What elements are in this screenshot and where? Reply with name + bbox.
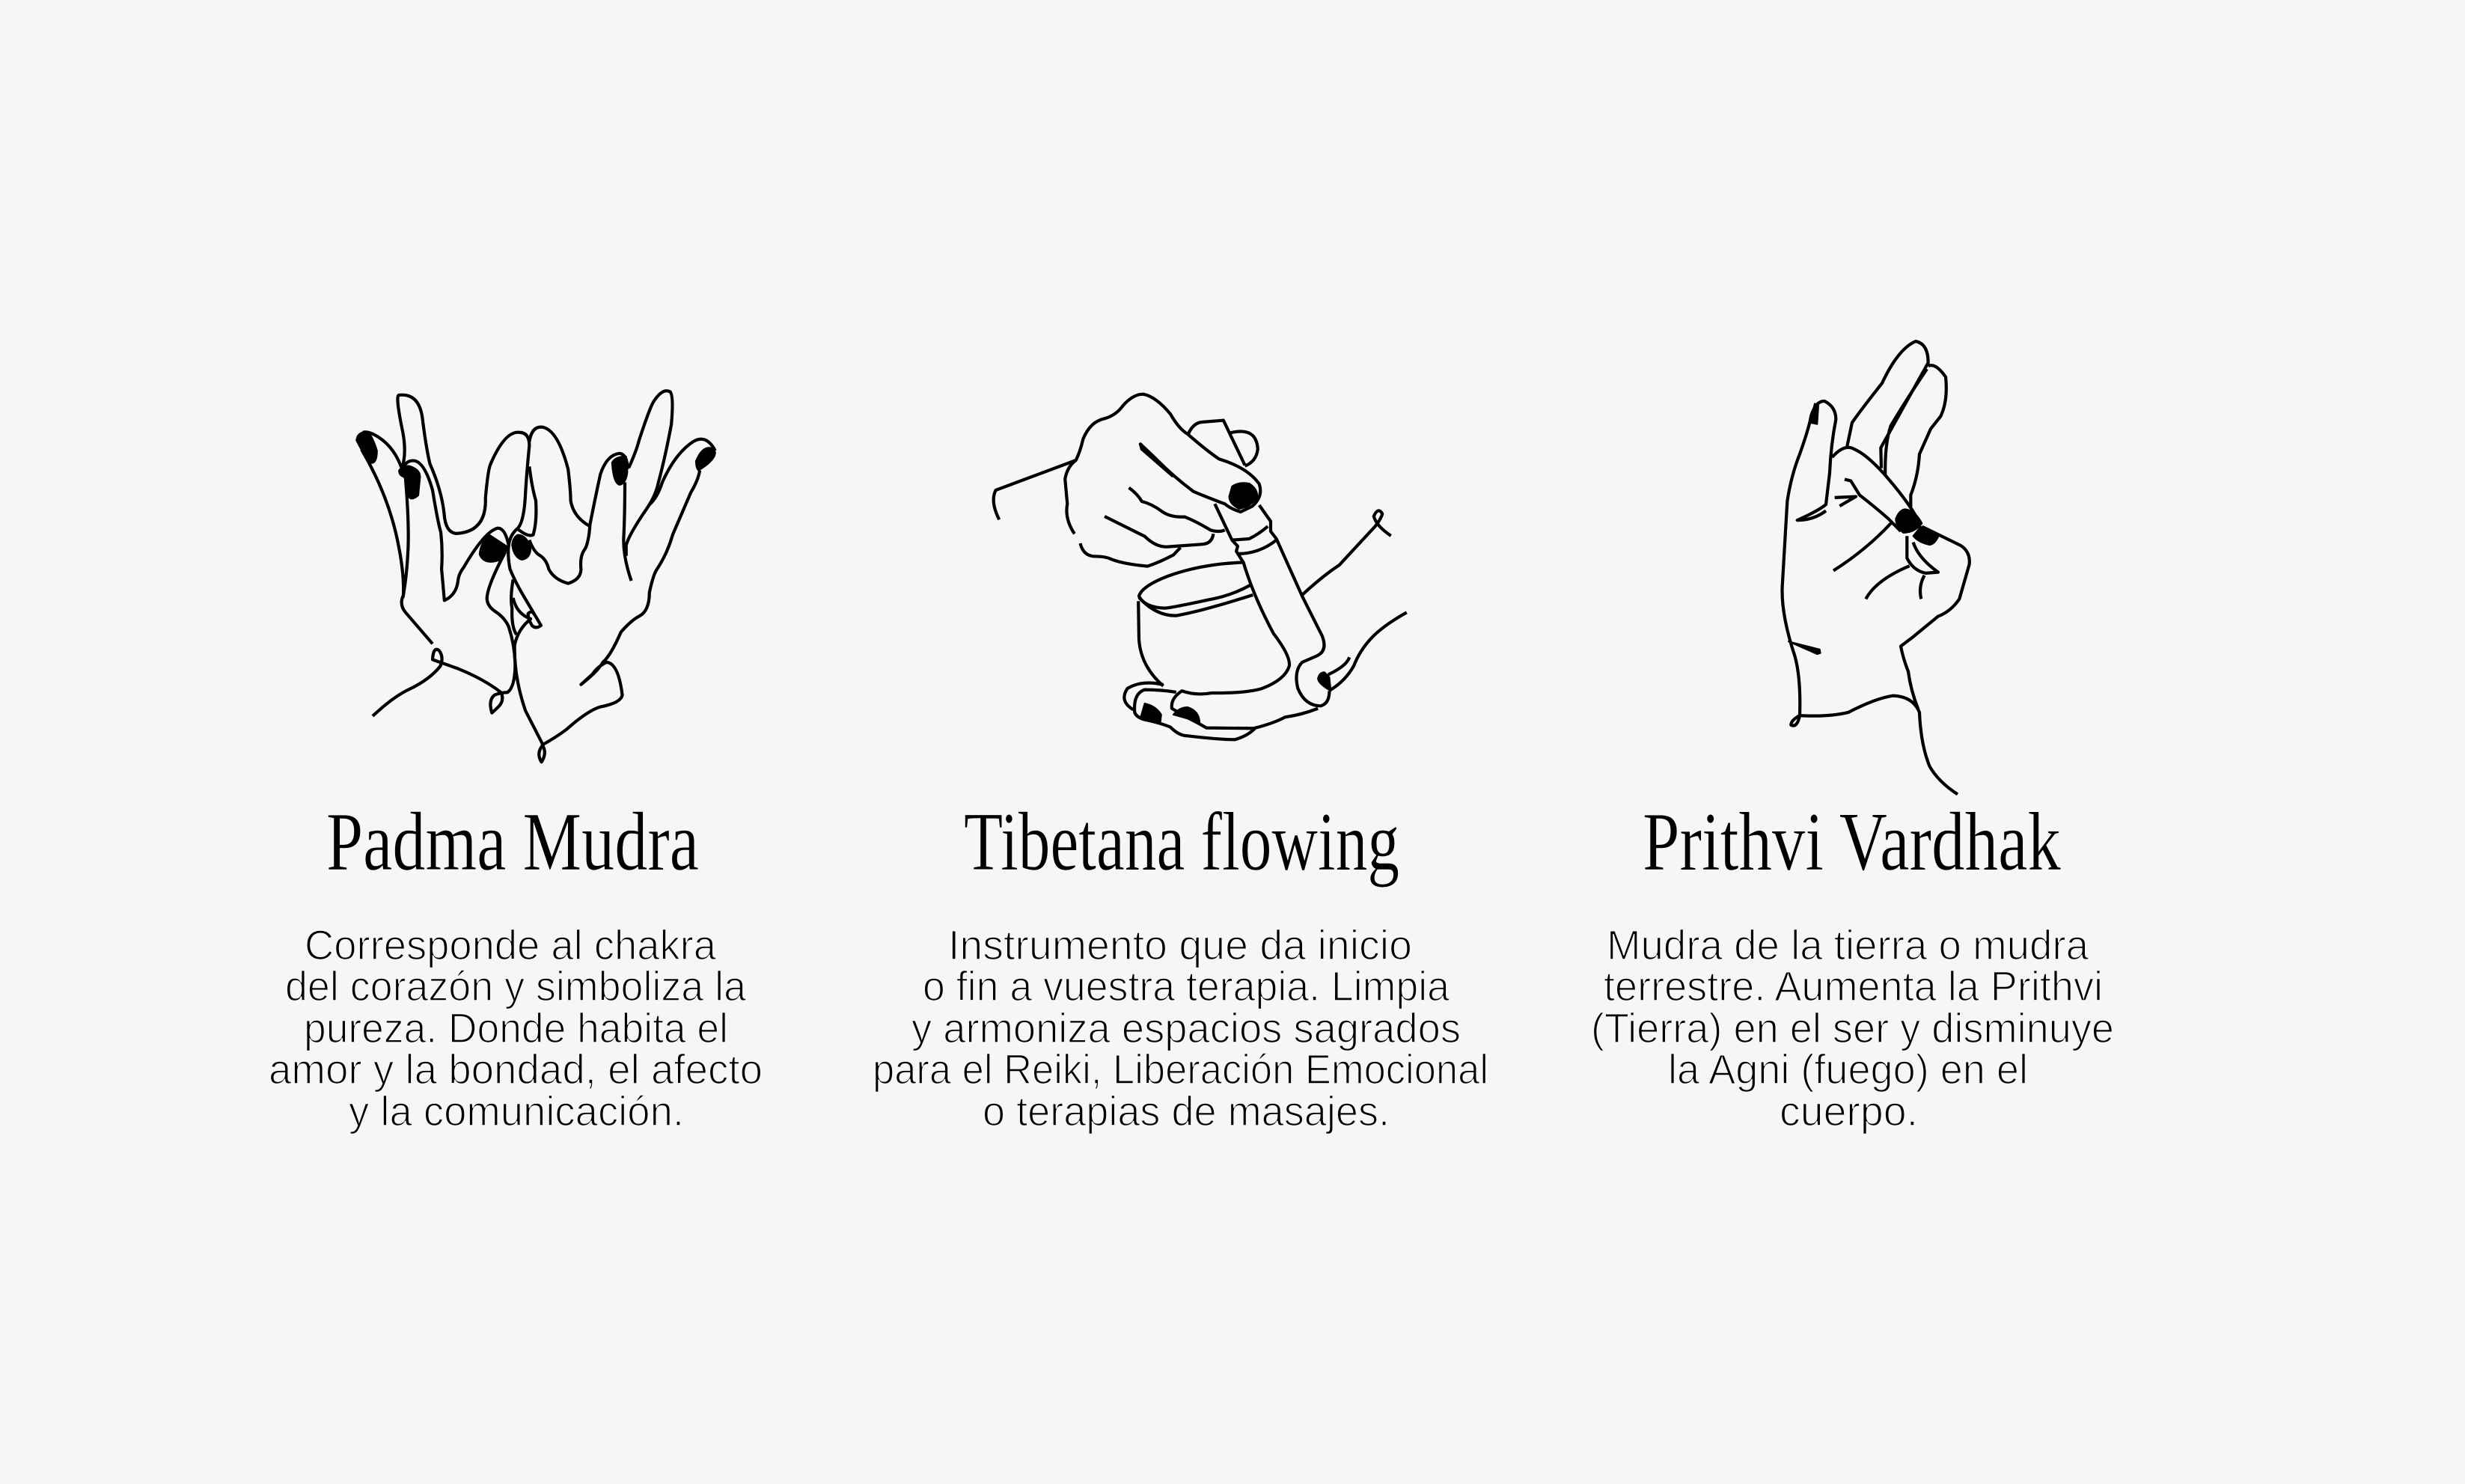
heading: Padma Mudra: Padma Mudra (326, 796, 699, 888)
text block: Prithvi Vardhak description (1591, 921, 2114, 1135)
panel: Prithvi Vardhak (1591, 341, 2114, 1135)
icon: hand in earth mudra (1783, 341, 1970, 794)
icon: two hands in lotus mudra (356, 391, 715, 762)
heading: Prithvi Vardhak: Prithvi Vardhak (1643, 796, 2061, 888)
text block: Padma Mudra description: pureza. Donde habita el (304, 1004, 728, 1051)
text block: Tibetana flowing description: o fin a vuestra terapia. Limpia (923, 962, 1450, 1010)
text block: Tibetana flowing description: y armoniza espacios sagrados (911, 1004, 1461, 1051)
text block: Prithvi Vardhak description: Mudra de la tierra o mudra (1607, 921, 2089, 968)
text block: Tibetana flowing description: Instrumento que da inicio (948, 921, 1412, 968)
text block: Padma Mudra description: y la comunicación. (349, 1087, 684, 1135)
text block: Prithvi Vardhak description: terrestre. Aumenta la Prithvi (1604, 962, 2103, 1010)
text block: Prithvi Vardhak description: cuerpo. (1780, 1087, 1918, 1135)
text block: Tibetana flowing description: para el Reiki, Liberación Emocional (873, 1045, 1488, 1093)
icon: hands holding singing bowl and mallet (994, 394, 1407, 739)
text block: Tibetana flowing description (873, 921, 1488, 1135)
text block: Prithvi Vardhak description: la Agni (fuego) en el (1668, 1045, 2028, 1093)
text block: Prithvi Vardhak description: (Tierra) en el ser y disminuye (1591, 1004, 2114, 1051)
text block: Padma Mudra description: Corresponde al chakra (305, 921, 717, 968)
text block: Tibetana flowing description: o terapias de masajes. (983, 1087, 1390, 1135)
text block: Padma Mudra description: amor y la bondad, el afecto (269, 1045, 763, 1093)
panel: Tibetana flowing (873, 394, 1488, 1135)
text block: Padma Mudra description (269, 921, 763, 1135)
text block: Padma Mudra description: del corazón y simboliza la (285, 962, 747, 1010)
panel: Padma Mudra (269, 391, 763, 1135)
heading: Tibetana flowing: Tibetana flowing (964, 796, 1399, 888)
